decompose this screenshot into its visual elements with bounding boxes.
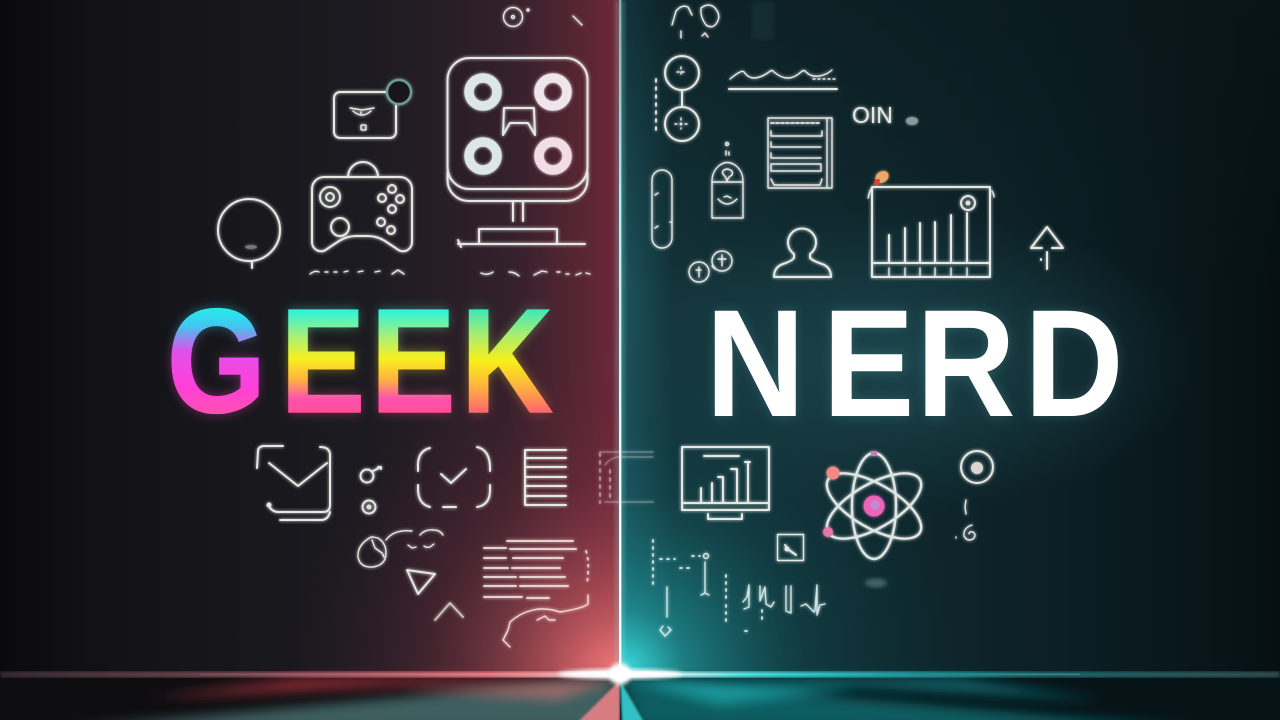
icon: large gaming monitor [448,58,588,247]
faint ghost shape [752,2,774,40]
title: GEEK: GEEK [167,279,553,444]
icon: bullet list [525,450,566,505]
icon: triangle [407,570,435,594]
icon: small spiral mark [956,500,975,540]
icon: person [774,229,831,277]
panel: geek side background [0,0,620,720]
arrow: up [1031,227,1063,269]
icon: globe with link curves [358,530,443,567]
icon: coins [689,251,732,282]
title: NERD: NERD [706,277,1124,449]
title: NERD: NERD [706,277,1124,449]
label: OIN: OIN [852,102,893,128]
smudge dot [906,117,918,125]
icon: envelope [257,446,330,520]
icon: lab jar [712,142,743,218]
icon: document list [768,118,832,188]
icon: top clouds sketch [672,5,719,38]
icon: capsule [652,170,672,248]
icon: atom [817,451,931,559]
floor reflection beams [0,676,1280,720]
icon: gender circle and target [360,467,381,514]
icon: connected network nodes [656,56,699,141]
smudge below atom [865,578,887,588]
squiggle trail [503,595,588,647]
text lines block [484,541,588,598]
icon: small card with ring [334,80,411,138]
icon: game controller [312,162,412,251]
icon: small square badge [778,534,804,560]
chart: bar dashboard [868,168,994,277]
dotted equation scribbles [653,540,762,636]
title: GEEK: GEEK [167,279,553,444]
center divider line [615,0,625,680]
icon: balloon circle [218,199,280,268]
waveform scribbles [743,585,825,615]
icon: top small circle and mark [504,8,582,26]
horizon light flare [0,663,1280,685]
icon: chevron [435,603,463,620]
icon: monitor with bar chart [682,447,769,519]
icon: ring with dot [961,451,993,483]
icon: scan frame with check [418,447,490,507]
faint hud crossing the divider [600,452,653,503]
icon: wave formula line [729,70,837,89]
squiggle text marks under controller and monitor [310,270,590,276]
panel: nerd side background [600,0,1280,720]
